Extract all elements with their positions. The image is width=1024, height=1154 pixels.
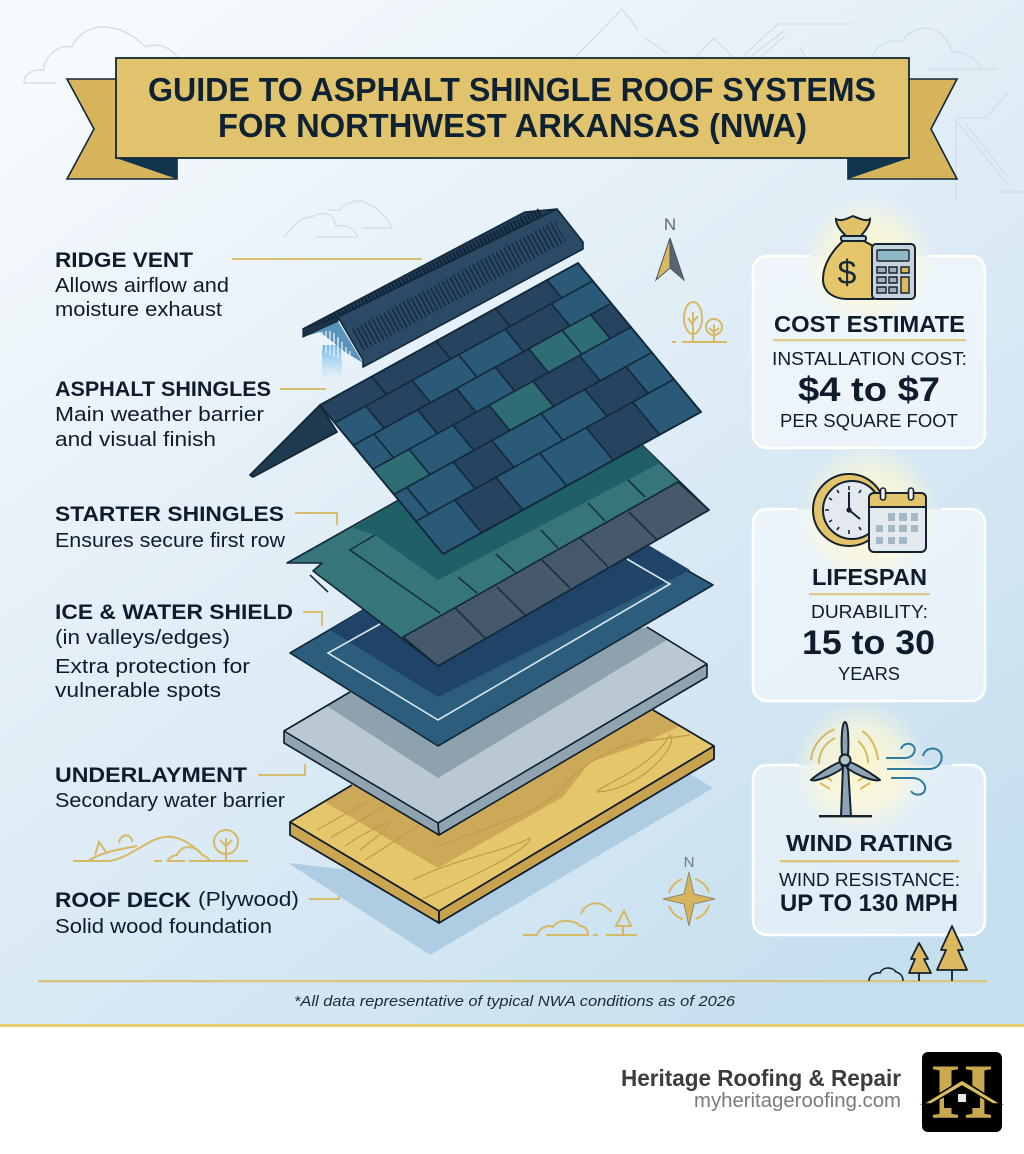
label: underlayment (55, 764, 305, 812)
card border (753, 765, 985, 935)
label: ice and water shield (55, 601, 322, 702)
heading rule (780, 860, 959, 862)
card heading: LIFESPAN (812, 564, 927, 590)
deck shaded area (325, 710, 680, 868)
teal sheet (287, 445, 709, 666)
icon: wind turbine (811, 722, 880, 817)
card unit: YEARS (838, 664, 900, 684)
icon: money bag: $ (838, 254, 857, 292)
icon: trees sketch (672, 302, 727, 342)
title text: GUIDE TO ASPHALT SHINGLE ROOF SYSTEMS (148, 71, 876, 108)
panel: wind rating (753, 700, 985, 935)
underlayment shadow (327, 627, 667, 778)
footer rule and trees (38, 926, 987, 982)
vent stripes (318, 331, 350, 363)
title text (148, 71, 876, 144)
deck ground shadow (288, 768, 713, 955)
card background (753, 765, 985, 935)
card sublabel: INSTALLATION COST: (772, 349, 967, 369)
shield surface (290, 537, 713, 746)
right ribbon tail (848, 79, 957, 179)
vent right slope (338, 209, 583, 367)
card value: UP TO 130 MPH (780, 890, 958, 917)
roof outline (320, 263, 701, 554)
label: ridge vent: moisture exhaust (55, 299, 222, 321)
underlayment top outline (284, 627, 707, 731)
layer: roof deck (288, 710, 714, 955)
shield white seam (328, 559, 670, 720)
label: roof deck (55, 877, 339, 938)
logo: H (932, 1048, 992, 1135)
label: ice and water shield: ICE & WATER SHIELD (55, 601, 293, 624)
footer band (0, 1024, 1024, 1154)
vent opening (303, 318, 363, 363)
icon: compass star (663, 854, 715, 926)
label: asphalt shingles: and visual finish (55, 429, 216, 451)
layer: underlayment (284, 627, 707, 835)
small edge line (310, 575, 328, 592)
card background (753, 256, 985, 448)
label: ice and water shield: vulnerable spots (55, 680, 221, 702)
icon: north arrow: N (664, 215, 676, 234)
teal shadow (353, 445, 660, 580)
icon: cloud and tree sketch (523, 903, 637, 935)
icon glow (792, 700, 928, 836)
card border (753, 256, 985, 448)
label: roof deck: (Plywood) (198, 889, 299, 911)
panel: lifespan (753, 443, 985, 701)
deck top outline (290, 710, 714, 822)
icon: north arrow (656, 215, 684, 280)
icon glow (797, 443, 941, 587)
dark starter row (403, 482, 709, 666)
shingle grid (320, 263, 701, 554)
icon: compass star: N (684, 854, 694, 871)
shield dark area (330, 540, 690, 697)
underlayment left edge (284, 731, 439, 835)
left ribbon tail (67, 79, 177, 179)
label: roof deck: Solid wood foundation (55, 916, 272, 938)
card background (753, 509, 985, 701)
footer website: myheritageroofing.com (694, 1090, 901, 1112)
layer: ice and water shield (290, 537, 713, 746)
underlayment surface (284, 627, 707, 823)
deck right edge (439, 746, 714, 923)
icon: clock (813, 474, 885, 546)
title banner (67, 58, 957, 179)
label: starter shingles (55, 503, 337, 552)
background sketches: clouds and house outlines (24, 9, 1024, 237)
icon: wind lines (886, 744, 942, 795)
layer: asphalt shingles (250, 263, 701, 554)
left fold (116, 158, 177, 179)
layer: starter shingles (287, 445, 709, 666)
label: roof deck: ROOF DECK (55, 889, 191, 912)
card border (753, 509, 985, 701)
right fold (848, 158, 909, 179)
icon: landscape sketch (73, 830, 248, 861)
icon: money bag (823, 216, 873, 299)
wood grain (317, 735, 690, 900)
label: ridge vent: RIDGE VENT (55, 249, 193, 272)
label: ridge vent (55, 249, 422, 321)
card unit: PER SQUARE FOOT (780, 411, 958, 431)
label: asphalt shingles: Main weather barrier (55, 404, 264, 426)
card value: $4 to $7 (798, 371, 940, 409)
air flow under vent (322, 345, 342, 379)
card sublabel: DURABILITY: (811, 602, 928, 622)
deck top surface (290, 710, 714, 911)
icon: calendar (869, 488, 926, 552)
card heading: WIND RATING (786, 830, 953, 856)
card value: 15 to 30 (802, 624, 935, 662)
vent end cap (303, 317, 338, 337)
footnote: *All data representative of typical NWA conditions as of 2026 (294, 993, 736, 1010)
heading rule (773, 339, 966, 341)
teal dividers (350, 480, 645, 613)
heading rule (809, 593, 930, 595)
label: ridge vent: Allows airflow and (55, 275, 229, 297)
label: asphalt shingles (55, 378, 326, 451)
starter row dividers (455, 512, 657, 638)
roof gable end (250, 405, 337, 477)
card sublabel: WIND RESISTANCE: (779, 870, 960, 890)
label: starter shingles: Ensures secure first row (55, 530, 286, 552)
icon glow (803, 196, 935, 328)
label: asphalt shingles: ASPHALT SHINGLES (55, 378, 271, 401)
deck left edge (290, 822, 439, 923)
label: ice and water shield: (in valleys/edges) (55, 627, 230, 649)
panel: cost estimate (753, 196, 985, 448)
label: starter shingles: STARTER SHINGLES (55, 503, 284, 526)
layer: ridge vent (303, 209, 583, 379)
icon: calculator (872, 244, 915, 299)
banner face (116, 58, 909, 158)
vent louvres (358, 231, 560, 340)
vent hatch (322, 212, 540, 324)
label: underlayment: UNDERLAYMENT (55, 764, 247, 787)
title text: FOR NORTHWEST ARKANSAS (NWA) (218, 107, 807, 144)
vent left slope (303, 209, 557, 329)
footer company name: Heritage Roofing & Repair (621, 1065, 901, 1091)
underlayment right edge (438, 664, 707, 835)
label: ice and water shield: Extra protection for (55, 656, 250, 678)
card heading: COST ESTIMATE (774, 311, 965, 337)
label: underlayment: Secondary water barrier (55, 790, 285, 812)
